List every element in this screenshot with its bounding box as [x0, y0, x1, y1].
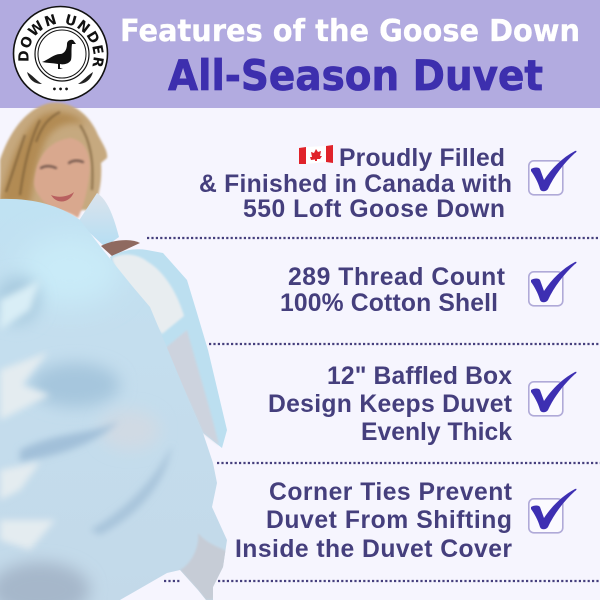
- hand: [101, 240, 140, 256]
- feature 4: corner ties: Corner Ties Prevent: [269, 479, 512, 506]
- feature 2: thread count: [280, 264, 505, 317]
- arm fold white inner: [112, 255, 184, 334]
- logo: Down Under goose badge: DOWN UNDER: [18, 14, 104, 66]
- feature 3: baffled box: 12" Baffled Box: [327, 363, 512, 390]
- feature 1: Canadian origin: 550 Loft Goose Down: [243, 196, 505, 223]
- feature 1: Canadian origin: & Finished in Canada with: [199, 171, 512, 198]
- duvet shading: [0, 235, 228, 600]
- checkbox 4: [529, 489, 576, 533]
- hair shading: [0, 112, 86, 203]
- divider 4: [164, 580, 181, 582]
- divider 2: [209, 343, 600, 345]
- divider 1: [147, 237, 600, 239]
- face: [34, 138, 90, 218]
- feature 4: corner ties: Inside the Duvet Cover: [235, 536, 512, 563]
- icon: Canadian flag: [299, 145, 333, 164]
- divider 3: [217, 462, 600, 464]
- feature 2: thread count: 289 Thread Count: [288, 264, 505, 291]
- feature 2: thread count: 100% Cotton Shell: [280, 290, 498, 317]
- feature 1: Canadian origin: Proudly Filled: [339, 145, 505, 172]
- hair streaks: [6, 112, 92, 195]
- feature 3: baffled box: Design Keeps Duvet: [268, 391, 512, 418]
- feature 3: baffled box: Evenly Thick: [361, 419, 512, 446]
- header band: [0, 0, 600, 108]
- arm duvet fold: [110, 249, 227, 448]
- photo: woman wrapped in duvet: [0, 103, 228, 600]
- eyes and mouth: [41, 161, 83, 168]
- feature 4: corner ties: [235, 479, 512, 563]
- feature 1: Canadian origin: [199, 145, 512, 223]
- back duvet fold: [78, 193, 119, 247]
- main duvet body: [0, 199, 227, 600]
- title line 2: All-Season Duvet: [168, 51, 543, 100]
- checkbox 1: [529, 151, 576, 195]
- feature 4: corner ties: Duvet From Shifting: [266, 507, 512, 534]
- checkbox 2: [529, 262, 576, 306]
- title line 1: Features of the Goose Down: [120, 14, 580, 49]
- checkbox 3: [529, 372, 576, 416]
- hair: [0, 103, 107, 210]
- logo: Down Under goose badge: [12, 6, 108, 102]
- logo: Down Under goose badge: •••: [52, 85, 70, 94]
- feature 3: baffled box: [268, 363, 512, 446]
- arm fold inner shadow: [163, 330, 219, 445]
